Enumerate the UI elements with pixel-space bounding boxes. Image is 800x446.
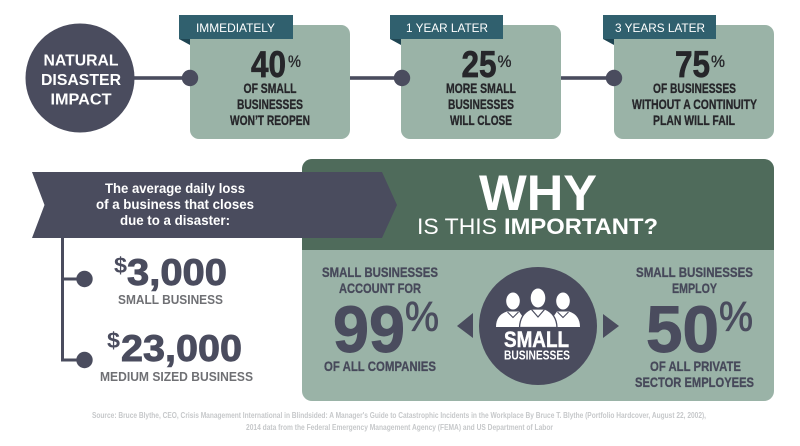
arrow left [457, 313, 473, 338]
stat: $3,000 small business: $ [114, 253, 127, 278]
stat: 40%: 40 [251, 44, 286, 85]
stat: 75%: 75 [675, 44, 710, 85]
panel: 3 years later [603, 15, 774, 139]
stat: 50% of all private sector employees: % [719, 293, 753, 340]
panel: 1 year later [390, 15, 561, 139]
stat: 99% of all companies: SMALL BUSINESSES [322, 264, 438, 280]
heading: why: WHY [479, 165, 597, 221]
stat: 50% of all private sector employees: SMALL BUSINESSES [636, 264, 753, 280]
stat: $23,000 medium sized business: MEDIUM SIZED BUSINESS [100, 369, 253, 384]
heading: is this important: IMPORTANT? [504, 214, 658, 239]
tag: 1 year later [390, 15, 503, 45]
stat: $3,000 small business: SMALL BUSINESS [118, 292, 223, 307]
text: of businesses without a continuity plan will fail [632, 80, 757, 128]
source note [92, 411, 706, 432]
stat: $3,000 small business [114, 252, 227, 307]
text: of small businesses won't reopen: WON’T REOPEN [230, 112, 310, 128]
bracket connector with dots [61, 238, 93, 368]
circle: natural disaster impact [26, 24, 134, 132]
stat: 25%: % [498, 52, 512, 71]
stat: 99% of all companies: % [405, 293, 439, 340]
stat: 99% of all companies: 99 [333, 292, 405, 366]
stat: 50% of all private sector employees: 50 [646, 292, 719, 366]
stat: 50% of all private sector employees: SECTOR EMPLOYEES [635, 374, 754, 390]
stat: $23,000 medium sized business: 23,000 [121, 328, 242, 369]
stat: $3,000 small business: 3,000 [127, 252, 227, 293]
banner: average daily loss: due to a disaster: [120, 212, 230, 228]
text: of businesses without a continuity plan will fail: OF BUSINESSES [653, 80, 736, 96]
circle: small businesses [479, 267, 597, 385]
circle: natural disaster impact: DISASTER [41, 72, 121, 89]
timeline dot 1 [182, 70, 198, 86]
stat: 40%: % [288, 52, 301, 71]
tag: 1 year later: 1 YEAR LATER [406, 21, 488, 35]
stat: 50% of all private sector employees: OF ALL PRIVATE [650, 358, 741, 374]
tag: immediately [179, 15, 293, 45]
circle: small businesses: BUSINESSES [504, 348, 570, 362]
icon: three business people [496, 288, 580, 328]
stat: 99% of all companies: OF ALL COMPANIES [324, 358, 436, 374]
circle: natural disaster impact: IMPACT [50, 92, 112, 109]
text: of businesses without a continuity plan will fail: WITHOUT A CONTINUITY [632, 96, 757, 112]
circle: natural disaster impact: NATURAL [44, 53, 119, 70]
stat: 75%: % [711, 52, 725, 71]
text: more small businesses will close [446, 80, 516, 128]
panel: immediately [179, 15, 350, 139]
stat: 25%: 25 [462, 44, 496, 85]
text: more small businesses will close: BUSINESSES [448, 96, 514, 112]
heading: is this important: IS THIS [417, 214, 497, 239]
stat: $23,000 medium sized business: $ [107, 328, 120, 353]
banner: average daily loss: The average daily loss [105, 180, 245, 196]
circle: small businesses: SMALL [504, 327, 569, 352]
stat: 50% of all private sector employees [635, 264, 754, 390]
arrow right [603, 314, 619, 338]
banner: average daily loss [32, 172, 397, 238]
text: of small businesses won't reopen: BUSINESSES [237, 96, 303, 112]
tag: 3 years later [603, 15, 716, 45]
text: of small businesses won't reopen [230, 80, 310, 128]
heading: is this important [417, 214, 658, 239]
text: more small businesses will close: WILL CLOSE [450, 112, 512, 128]
source note: 2014 data from the Federal Emergency Management Agency (FEMA) and US Department of Labor [246, 423, 553, 432]
timeline dot 2 [394, 70, 410, 86]
stat: 99% of all companies [322, 264, 439, 374]
stat: $23,000 medium sized business [100, 328, 253, 384]
panel: why is this important [302, 159, 774, 401]
banner: average daily loss: of a business that closes [96, 196, 254, 212]
stat: 50% of all private sector employees: EMPLOY [672, 280, 717, 296]
timeline dot 3 [606, 70, 622, 86]
text: of small businesses won't reopen: OF SMALL [244, 80, 297, 96]
timeline connector lines [130, 76, 614, 80]
stat: 99% of all companies: ACCOUNT FOR [339, 280, 421, 296]
tag: immediately: IMMEDIATELY [196, 21, 275, 35]
text: of businesses without a continuity plan will fail: PLAN WILL FAIL [653, 112, 735, 128]
text: more small businesses will close: MORE SMALL [446, 80, 516, 96]
tag: 3 years later: 3 YEARS LATER [615, 21, 705, 35]
